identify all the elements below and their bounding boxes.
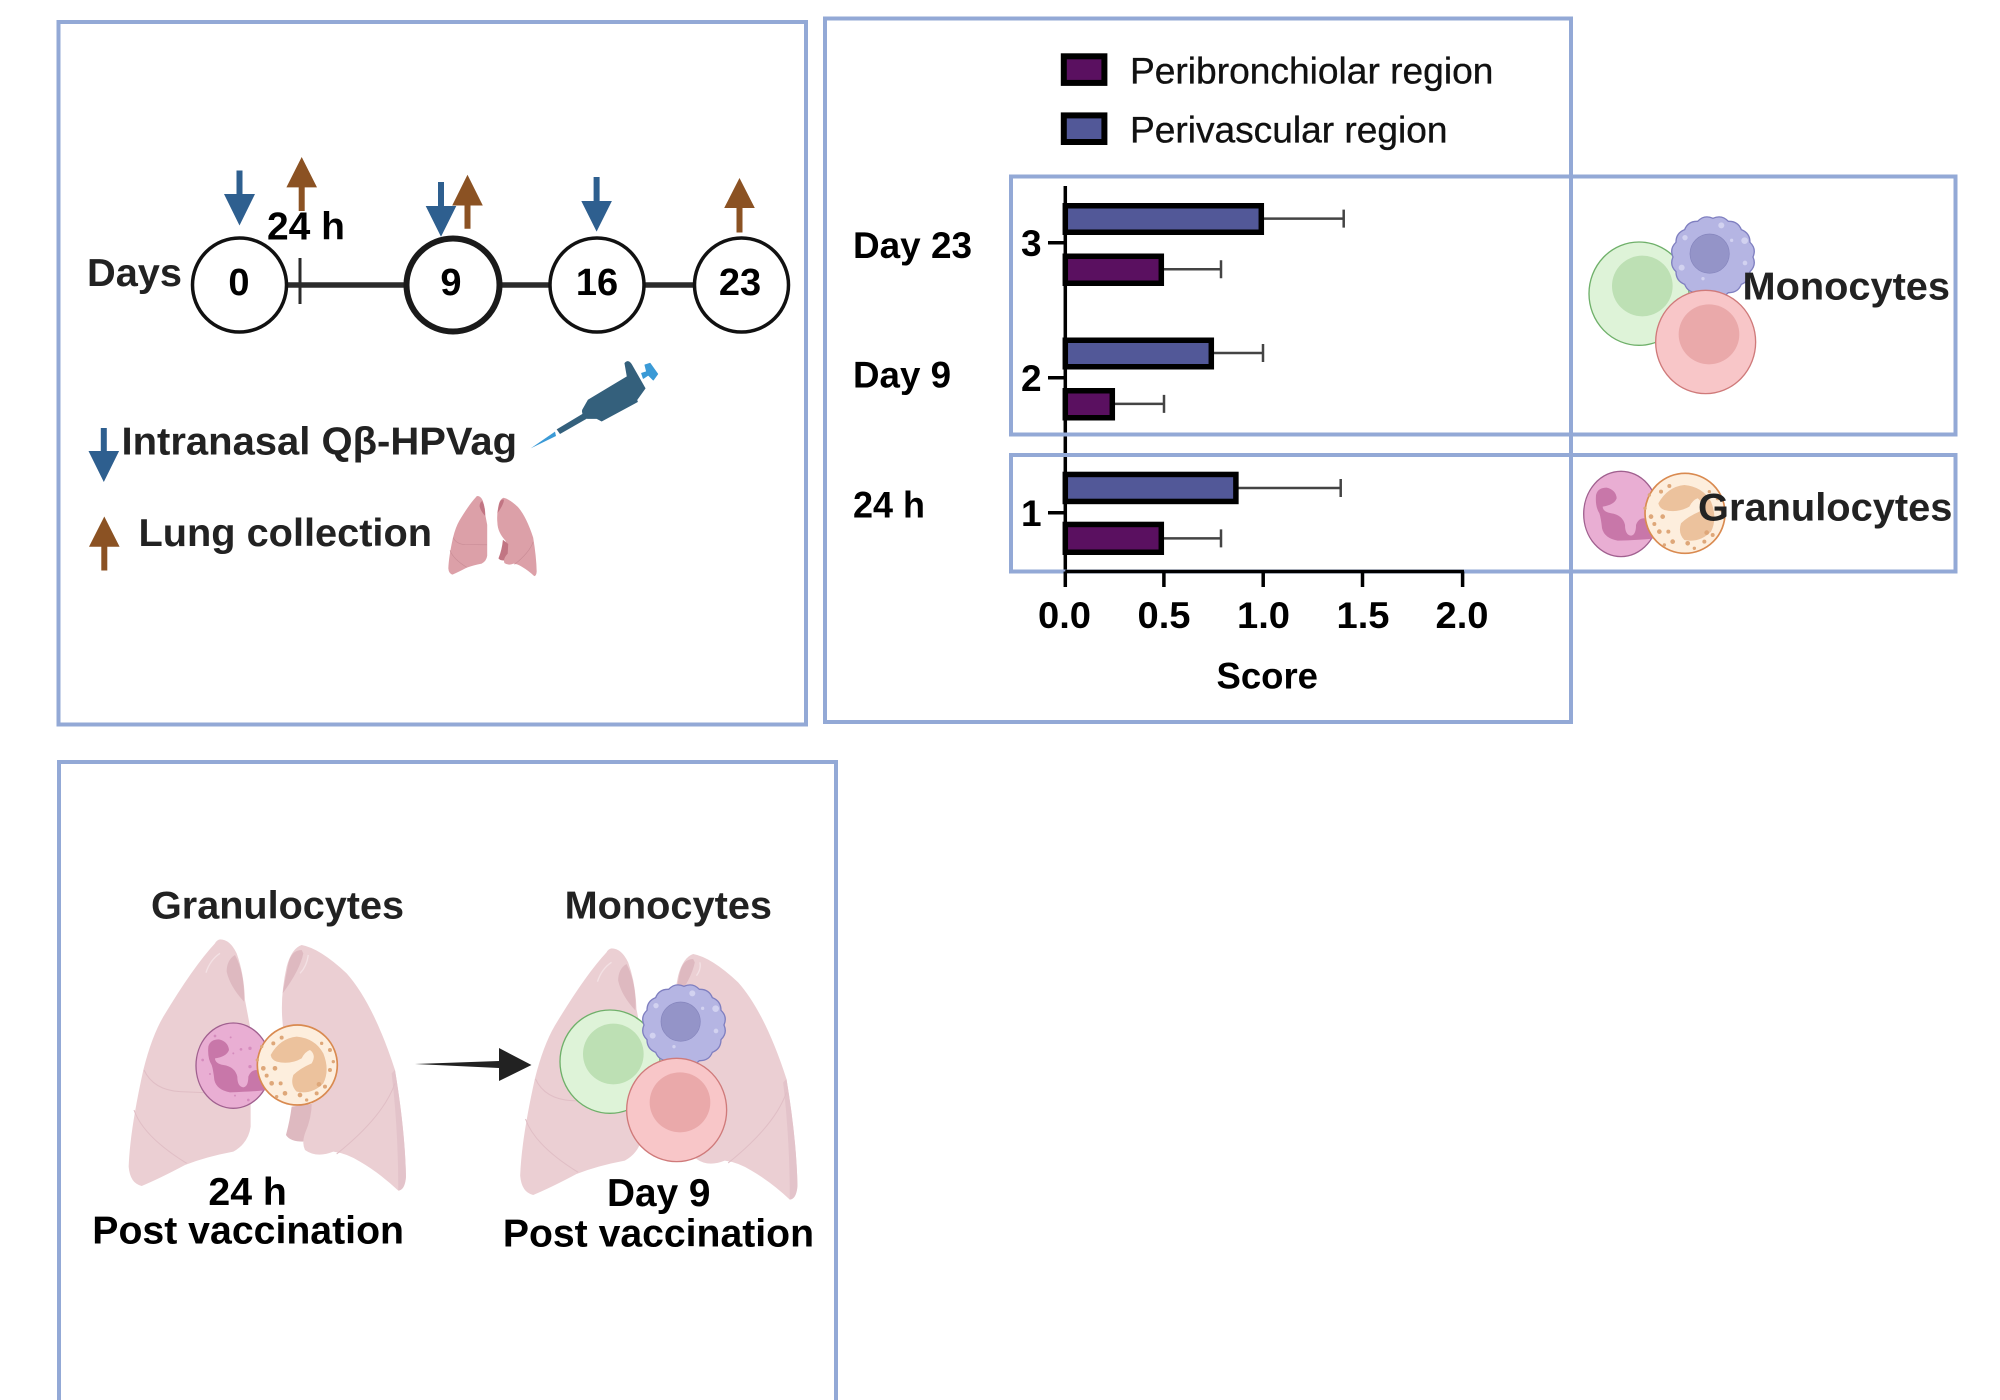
monocyte cluster (560, 985, 727, 1162)
x axis tick labels: 2.0 (1436, 595, 1488, 636)
x axis tick labels: 1.0 (1237, 595, 1290, 636)
timeline node: day 9 (406, 238, 500, 332)
caption: Day 9 post vaccination: Day 9 (607, 1172, 710, 1215)
legend: perivascular swatch and label: Perivascular region (1130, 110, 1448, 151)
bars: 24 h peribronchiolar (1065, 524, 1161, 552)
panel border: timeline (58, 22, 806, 724)
arrow: vaccination at day 9 (426, 182, 456, 237)
timeline node: day 23: 23 (719, 262, 761, 304)
lungs (129, 939, 406, 1191)
legend arrow: lung collection (89, 516, 120, 570)
row label: Day 23: Day 23 (853, 225, 972, 266)
timeline node: day 0 (192, 238, 286, 332)
illustration: lungs with monocytes (520, 948, 797, 1200)
y tick label 3: 3 (1021, 223, 1042, 264)
legend text: intranasal: Intranasal Qβ-HPVag (122, 421, 517, 464)
arrow: lung collection at 24 h (286, 157, 317, 211)
callout box: granulocytes row (1011, 455, 1956, 572)
y tick label 1: 1 (1021, 493, 1042, 534)
timeline node: day 9: 9 (440, 262, 462, 304)
legend arrow: intranasal dose (88, 428, 119, 482)
x axis tick labels: 0.0 (1038, 595, 1091, 636)
x axis title: Score: Score (1216, 655, 1318, 696)
x axis tick labels: 1.5 (1336, 595, 1390, 636)
chart: horizontal bars with error bars (1048, 186, 1344, 571)
label: 24 h: 24 h (267, 206, 345, 248)
error bars (1113, 210, 1344, 547)
icon: monocyte cluster in chart callout (1589, 217, 1756, 394)
panel: vaccination timeline (58, 22, 806, 724)
bars: Day 9 perivascular (1065, 340, 1211, 367)
y tick label 2: 2 (1021, 358, 1042, 399)
timeline node: day 16: 16 (576, 262, 618, 304)
panel: score bar chart (825, 18, 1571, 722)
label: Days: Days (87, 252, 182, 295)
y axis (1048, 186, 1065, 571)
icon: granulocyte pair in chart callout (1584, 471, 1725, 557)
bars: 24 h perivascular (1065, 474, 1236, 501)
panel: lung summary (59, 762, 836, 1400)
chart x axis (1065, 572, 1464, 587)
bars: Day 23 perivascular (1065, 206, 1261, 232)
cell: eosinophil (256, 1025, 337, 1105)
label: Monocytes (callout): Monocytes (1742, 266, 1950, 309)
caption: Day 9 post vaccination (503, 1172, 814, 1255)
timeline axis line (285, 258, 695, 304)
legend text: lung collection: Lung collection (138, 512, 432, 555)
cell: neutrophil (196, 1023, 271, 1108)
callout box: monocytes rows (1011, 176, 1956, 434)
heading: Monocytes: Monocytes (565, 885, 772, 928)
bars: Day 23 peribronchiolar (1065, 256, 1161, 283)
arrow: progression (415, 1048, 532, 1081)
lungs (520, 948, 797, 1200)
arrow: lung collection at day 23 (724, 178, 755, 232)
panel border: chart (825, 18, 1571, 722)
caption: 24 h post vaccination (92, 1171, 404, 1252)
row label: Day 9: Day 9 (853, 355, 951, 396)
bars: Day 9 peribronchiolar (1065, 391, 1112, 418)
caption: Day 9 post vaccination: Post vaccination (503, 1212, 814, 1255)
caption: 24 h post vaccination: Post vaccination (92, 1209, 404, 1252)
arrow: vaccination at day 0 (224, 170, 255, 226)
panel border: open-bottom frame (59, 762, 836, 1400)
arrow: lung collection at day 9 (452, 175, 483, 229)
heading: Granulocytes: Granulocytes (151, 885, 404, 928)
illustration: lungs with granulocytes (129, 939, 406, 1191)
timeline node: day 23 (694, 238, 788, 332)
timeline node: day 16 (550, 238, 644, 332)
x axis tick labels: 0.5 (1138, 595, 1190, 636)
legend: peribronchiolar swatch and label: Peribronchiolar region (1130, 51, 1493, 92)
caption: 24 h post vaccination: 24 h (208, 1171, 287, 1214)
icon: small lungs (448, 496, 537, 576)
x axis tick labels (1038, 595, 1488, 636)
timeline node: day 0: 0 (228, 262, 250, 304)
arrow: vaccination at day 16 (581, 177, 612, 232)
row label: 24 h: 24 h (853, 484, 925, 526)
label: Granulocytes (callout): Granulocytes (1698, 487, 1952, 530)
icon: pipette (531, 362, 658, 448)
